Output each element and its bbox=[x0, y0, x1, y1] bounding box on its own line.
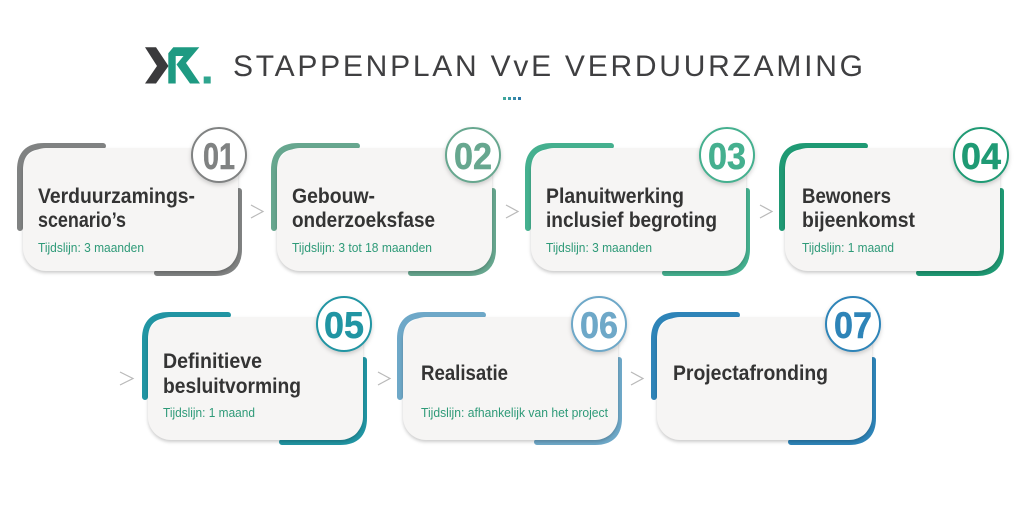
step 02: onderzoeksfase bbox=[292, 209, 435, 232]
arrow 4-5 bbox=[120, 372, 133, 385]
step 03 bbox=[528, 128, 754, 273]
step 06: 06 bbox=[580, 305, 618, 346]
step 01 bbox=[20, 128, 246, 273]
title: STAPPENPLAN VvE VERDUURZAMING bbox=[233, 50, 863, 83]
step 05: Definitieve bbox=[163, 350, 262, 373]
step 02: Gebouw- bbox=[292, 185, 375, 208]
step 03: Tijdslijn: 3 maanden bbox=[546, 240, 652, 255]
step 04: Bewoners bbox=[802, 185, 891, 208]
step 04: 04 bbox=[961, 136, 1001, 177]
logo bbox=[145, 47, 211, 84]
step 05 bbox=[145, 297, 371, 442]
step 01: Verduurzamings- bbox=[38, 185, 195, 208]
step 05: 05 bbox=[324, 305, 364, 346]
step 04: Tijdslijn: 1 maand bbox=[802, 240, 894, 255]
step 06: Realisatie bbox=[421, 362, 508, 385]
arrow 1-2 bbox=[251, 205, 263, 218]
step 07 bbox=[654, 297, 880, 442]
step 05: Tijdslijn: 1 maand bbox=[163, 405, 255, 420]
step 04 bbox=[782, 128, 1008, 273]
step 01: scenario’s bbox=[38, 209, 126, 232]
step 01: 01 bbox=[203, 136, 235, 177]
step 05: besluitvorming bbox=[163, 375, 301, 398]
arrow 5-6 bbox=[378, 372, 390, 385]
step 03: Planuitwerking bbox=[546, 185, 684, 208]
step 03: inclusief begroting bbox=[546, 209, 717, 232]
arrow 3-4 bbox=[760, 205, 772, 218]
step 07: 07 bbox=[834, 305, 872, 346]
title dots bbox=[503, 97, 521, 100]
step 06 bbox=[400, 297, 626, 442]
step 07: Projectafronding bbox=[673, 362, 828, 385]
arrow 6-7 bbox=[631, 372, 643, 385]
arrow 2-3 bbox=[506, 205, 518, 218]
step 02: 02 bbox=[454, 136, 492, 177]
step 02 bbox=[274, 128, 500, 273]
step 04: bijeenkomst bbox=[802, 209, 915, 232]
step 02: Tijdslijn: 3 tot 18 maanden bbox=[292, 240, 432, 255]
step 03: 03 bbox=[708, 136, 746, 177]
step 06: Tijdslijn: afhankelijk van het project bbox=[421, 405, 608, 420]
step 01: Tijdslijn: 3 maanden bbox=[38, 240, 144, 255]
